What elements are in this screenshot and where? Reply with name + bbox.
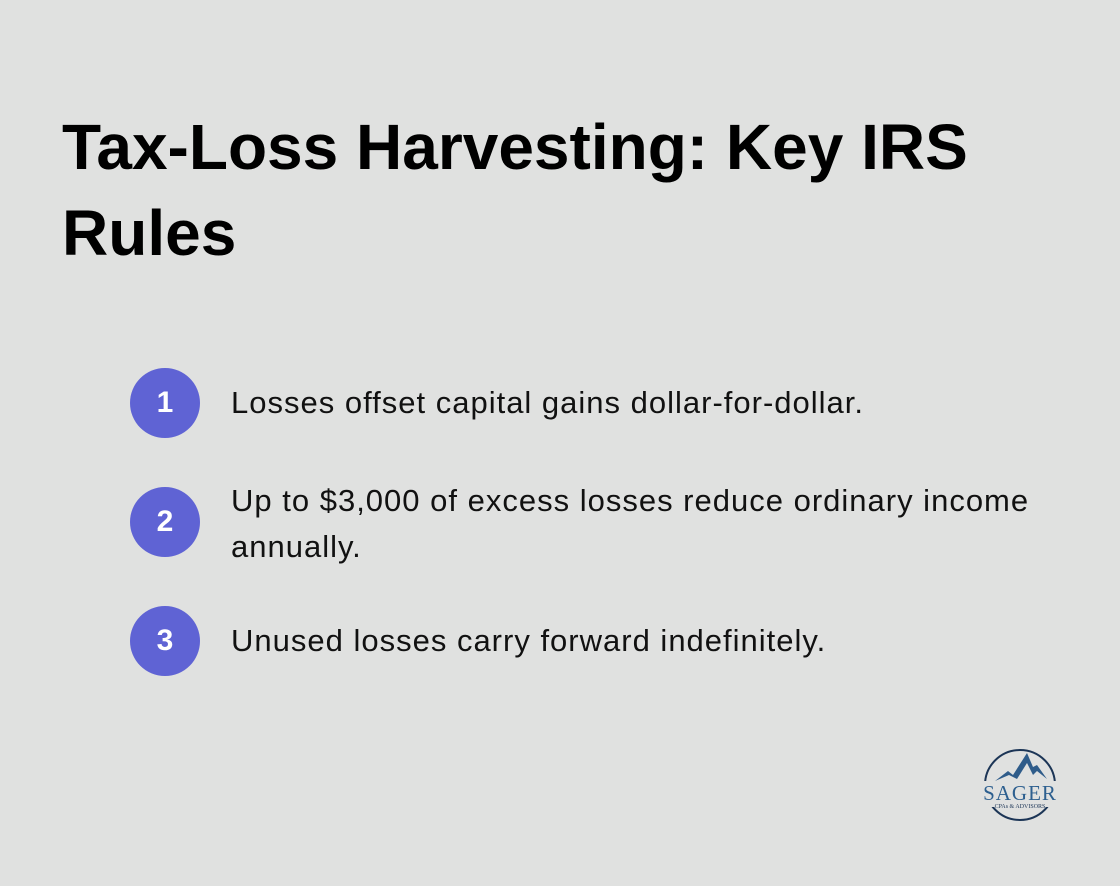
text 2: Up to $3,000 of excess losses reduce ordinary income annually. xyxy=(231,483,1029,564)
item 1 xyxy=(130,368,864,438)
item 2 xyxy=(130,483,1029,564)
number badge 1 xyxy=(130,368,200,438)
logo: CPAs & ADVISORS xyxy=(995,804,1045,810)
text 3: Unused losses carry forward indefinitely. xyxy=(231,623,826,658)
number badge 1: 1 xyxy=(157,386,173,419)
title: Tax-Loss Harvesting: Key IRS Rules xyxy=(62,111,968,269)
logo xyxy=(983,749,1057,821)
number badge 3 xyxy=(130,606,200,676)
number badge 2: 2 xyxy=(157,505,173,538)
number badge 2 xyxy=(130,487,200,557)
item 3 xyxy=(130,606,826,676)
logo: SAGER xyxy=(983,781,1057,805)
number badge 3: 3 xyxy=(157,624,173,657)
text 1: Losses offset capital gains dollar-for-dollar. xyxy=(231,385,864,420)
